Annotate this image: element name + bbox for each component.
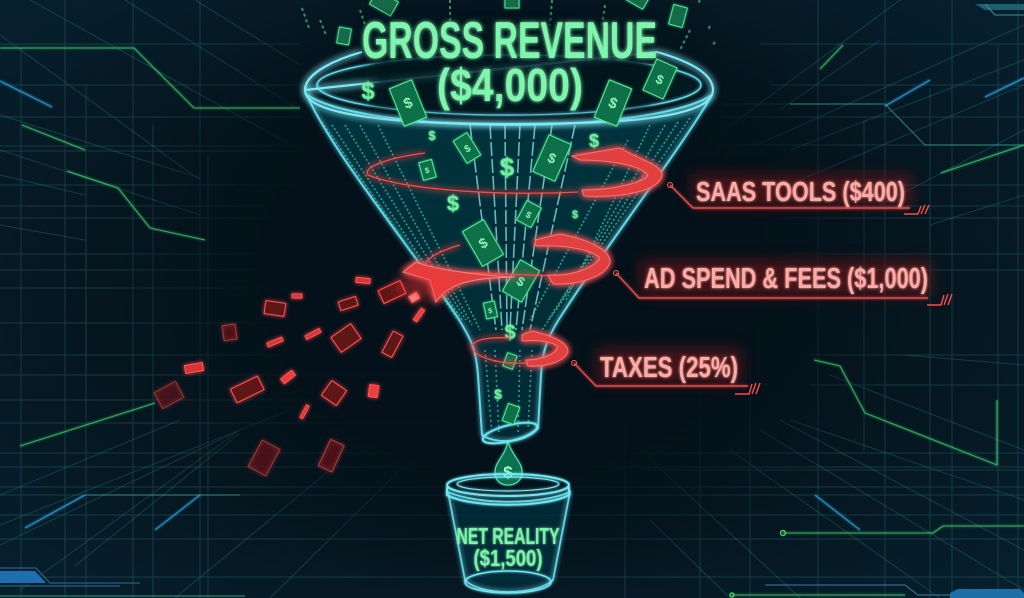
red spill glow — [397, 271, 453, 299]
net reality label: ($1,500) — [474, 545, 542, 571]
bill — [503, 353, 517, 369]
bill — [517, 201, 541, 227]
bill — [502, 403, 520, 425]
escaping red bills — [154, 277, 425, 476]
bill: $ — [545, 149, 559, 167]
callout: SaaS tools — [668, 174, 929, 214]
net reality bucket — [447, 474, 570, 593]
bill — [594, 80, 632, 126]
money drop icon: $ — [503, 463, 513, 482]
dollar signs in funnel: $ — [572, 209, 578, 221]
dollar signs in funnel — [361, 78, 599, 402]
dollar signs in funnel: $ — [504, 322, 516, 344]
title — [362, 12, 657, 111]
bill: $ — [476, 234, 491, 252]
bill: $ — [653, 71, 667, 88]
bill: $ — [424, 165, 431, 175]
bucket base — [465, 571, 551, 593]
circuit nodes — [730, 530, 786, 597]
title backing — [370, 20, 650, 108]
bill — [419, 159, 436, 180]
bill — [643, 59, 677, 99]
title: ($4,000) — [437, 59, 583, 111]
bucket rim — [447, 474, 569, 505]
dollar signs in funnel: $ — [428, 128, 436, 143]
bucket body — [448, 492, 570, 592]
red ring: SaaS tools — [367, 148, 662, 196]
dollar signs in funnel: $ — [447, 191, 459, 216]
falling bills above funnel — [337, 0, 687, 45]
spout mouth — [481, 418, 539, 448]
red ring: ad spend with breach arrow — [403, 234, 610, 302]
funnel back rim — [317, 55, 701, 115]
funnel body — [307, 95, 712, 441]
bill — [533, 135, 571, 181]
bill: $ — [488, 308, 493, 315]
dollar signs in funnel: $ — [494, 386, 502, 402]
circuit traces: blue — [0, 78, 1024, 530]
bill: $ — [463, 143, 473, 155]
funnel data streams — [322, 118, 690, 435]
falling data particles — [302, 0, 715, 50]
net reality label: NET REALITY — [456, 523, 560, 549]
callout: ad spend and fees — [614, 260, 952, 305]
bill: $ — [606, 94, 620, 113]
funnel outer rim — [305, 52, 713, 124]
bill: $ — [514, 273, 528, 290]
bill — [483, 301, 498, 319]
red ring: taxes — [472, 331, 568, 366]
dollar signs in funnel: $ — [361, 78, 375, 105]
bill: $ — [401, 94, 416, 113]
dollar signs in funnel: $ — [589, 131, 599, 151]
bill — [453, 133, 481, 163]
teal traces — [85, 104, 1024, 539]
funnel — [305, 52, 713, 448]
bill — [502, 260, 540, 302]
dollar signs in funnel: $ — [500, 152, 515, 182]
money drop icon — [495, 442, 522, 485]
callout: taxes: TAXES (25%) — [600, 352, 738, 384]
bills in funnel — [389, 59, 677, 425]
bill — [463, 220, 503, 266]
callout: SaaS tools: SAAS TOOLS ($400) — [696, 176, 905, 207]
callout: ad spend and fees: AD SPEND & FEES ($1,000) — [644, 263, 928, 295]
hud corner bottom left — [0, 568, 245, 596]
bill: $ — [524, 209, 533, 220]
net reality label — [456, 523, 560, 571]
hud corner top right — [975, 4, 1024, 15]
hud corner bottom right — [765, 585, 1024, 598]
title: GROSS REVENUE — [362, 12, 657, 70]
callout: taxes — [572, 348, 760, 394]
bill — [389, 80, 427, 126]
